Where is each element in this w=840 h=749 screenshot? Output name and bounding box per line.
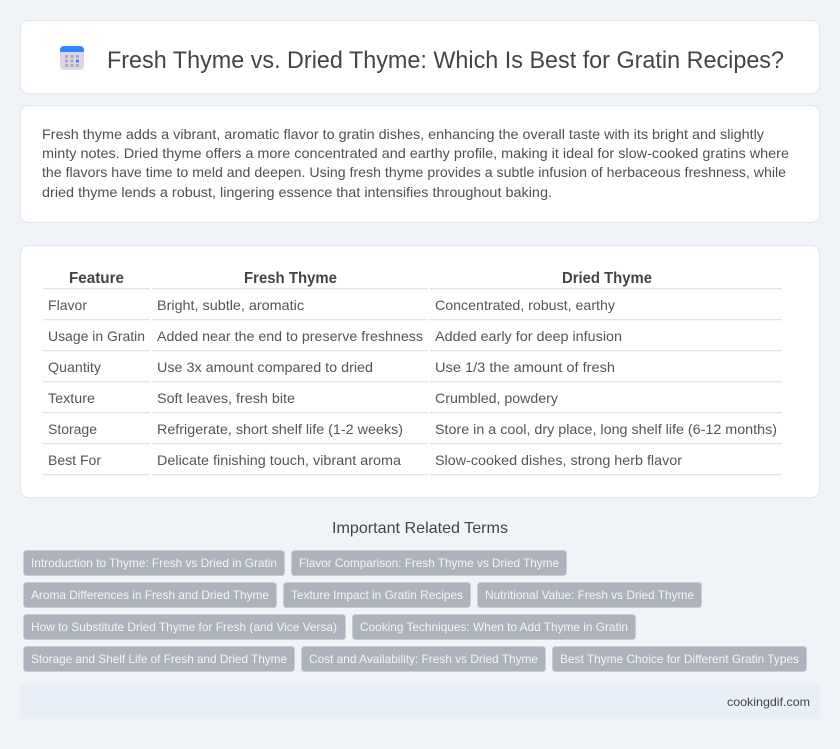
row: best for: Slow-cooked dishes, strong herb flavor: [435, 452, 682, 468]
row: storage: Refrigerate, short shelf life (1-2 weeks): [157, 421, 403, 437]
row: texture: Soft leaves, fresh bite: [157, 390, 295, 406]
tag: [552, 646, 806, 672]
row: flavor: Bright, subtle, aromatic: [157, 297, 304, 313]
tag: [24, 582, 276, 608]
tag: Aroma Differences in Fresh and Dried Thyme: [31, 588, 269, 602]
tag: Cooking Techniques: When to Add Thyme in Gratin: [360, 620, 628, 634]
tag: [352, 614, 636, 640]
tag: Best Thyme Choice for Different Gratin Types: [560, 652, 799, 666]
table header row: Fresh Thyme: [244, 270, 337, 287]
tag: [302, 646, 546, 672]
tag: [478, 582, 702, 608]
row: usage in gratin: Added early for deep infusion: [435, 328, 622, 344]
row: usage in gratin: Added near the end to preserve freshness: [157, 328, 423, 344]
row: quantity: Use 1/3 the amount of fresh: [435, 359, 615, 375]
tag: [24, 646, 294, 672]
row: quantity: [48, 359, 615, 375]
row: flavor: Concentrated, robust, earthy: [435, 297, 615, 313]
row: storage: [48, 421, 777, 437]
text block: introduction: the flavors have time to meld and deepen. Using fresh thyme provides a subtle infusion of herbaceous freshness, while: [42, 164, 786, 180]
tag: [284, 582, 470, 608]
row: quantity: Use 3x amount compared to dried: [157, 359, 373, 375]
heading: important related terms: Important Related Terms: [332, 520, 508, 537]
tag: Cost and Availability: Fresh vs Dried Thyme: [309, 652, 538, 666]
tag: [292, 550, 566, 576]
footer: [20, 685, 820, 719]
row: best for: Delicate finishing touch, vibrant aroma: [157, 452, 401, 468]
row: usage in gratin: Usage in Gratin: [48, 328, 145, 344]
text block: introduction: minty notes. Dried thyme offers a more concentrated and earthy profile, making it ideal for slow-cooked gratins where: [42, 145, 789, 161]
row: flavor: Flavor: [48, 297, 87, 313]
text block: introduction: dried thyme lends a robust, lingering essence that intensifies throughout baking.: [42, 184, 552, 200]
tag: [24, 614, 346, 640]
row: texture: [48, 390, 558, 406]
text block: introduction: [42, 126, 789, 200]
tag: Introduction to Thyme: Fresh vs Dried in Gratin: [31, 556, 277, 570]
row: best for: [48, 452, 682, 468]
table header row: Feature: [69, 270, 124, 287]
icon: calendar: [60, 46, 84, 70]
panel: comparison table: [20, 246, 820, 498]
tag: Flavor Comparison: Fresh Thyme vs Dried Thyme: [299, 556, 559, 570]
row: storage: Store in a cool, dry place, long shelf life (6-12 months): [435, 421, 777, 437]
row: storage: Storage: [48, 421, 97, 437]
panel: introduction text: [20, 106, 820, 222]
tag: [24, 550, 284, 576]
row: texture: Texture: [48, 390, 95, 406]
row: best for: Best For: [48, 452, 101, 468]
row: texture: Crumbled, powdery: [435, 390, 558, 406]
tag: Storage and Shelf Life of Fresh and Dried Thyme: [31, 652, 287, 666]
tag: How to Substitute Dried Thyme for Fresh (and Vice Versa): [31, 620, 337, 634]
tag: Texture Impact in Gratin Recipes: [291, 588, 463, 602]
footer source text: cookingdif.com: [727, 695, 810, 709]
row: usage in gratin: [48, 328, 622, 344]
panel: header: [20, 20, 820, 94]
table header row: [69, 270, 652, 287]
text block: introduction: Fresh thyme adds a vibrant, aromatic flavor to gratin dishes, enhancing the overall taste with its bright and slightly: [42, 126, 764, 142]
tag list: related terms: [24, 550, 806, 672]
row: quantity: Quantity: [48, 359, 101, 375]
row: flavor: [48, 297, 615, 313]
table header row: Dried Thyme: [562, 270, 652, 287]
title: Fresh Thyme vs. Dried Thyme: Which Is Best for Gratin Recipes?: [107, 47, 784, 74]
tag: Nutritional Value: Fresh vs Dried Thyme: [485, 588, 694, 602]
